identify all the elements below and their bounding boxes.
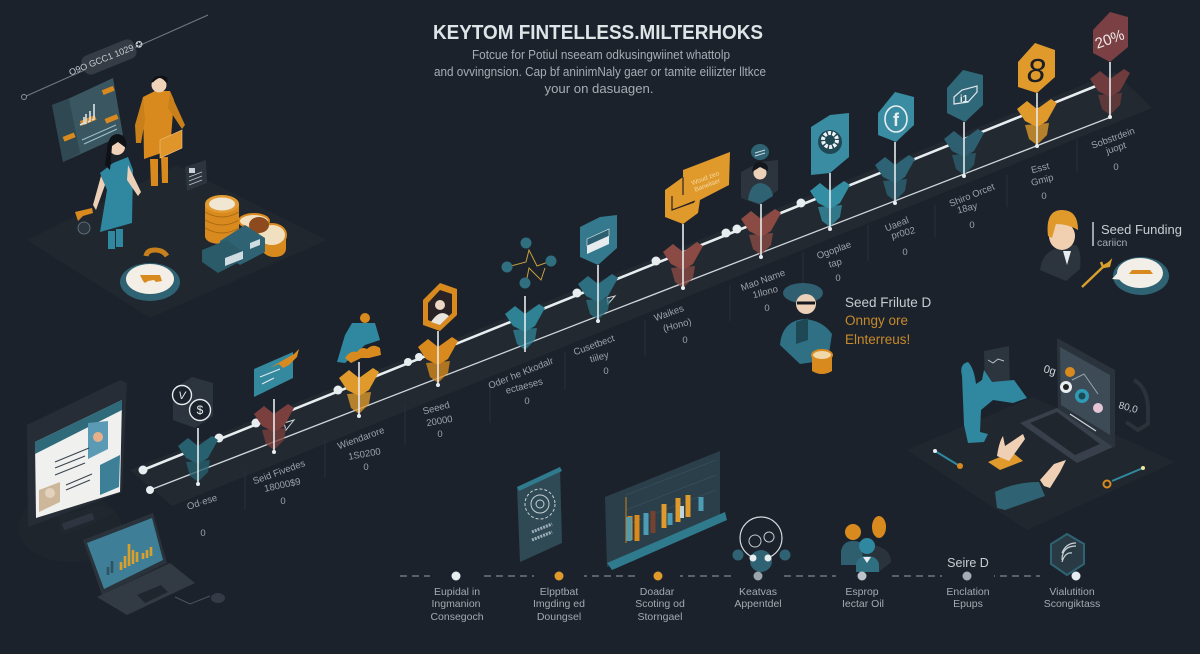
desktop monitor xyxy=(18,380,127,562)
step labels: Elpptbat xyxy=(540,586,578,598)
step labels: Scoting od xyxy=(635,598,685,610)
label dividers xyxy=(245,140,1077,510)
timeline labels: 0 xyxy=(1041,191,1047,202)
step labels: Ingmanion xyxy=(431,598,481,610)
metric badge on line: O9O GCC1 1029 ✪ xyxy=(67,38,145,77)
timeline labels: 0 xyxy=(835,273,841,284)
intro text: Fotcue for Potiul nseeam odkusingwiinet whattolp xyxy=(472,48,730,62)
callout text: Onngy ore xyxy=(845,313,908,328)
timeline labels: tap xyxy=(828,257,843,271)
milestone 5 xyxy=(502,238,556,352)
tablet icon xyxy=(517,467,562,562)
cash bundles xyxy=(202,225,265,273)
vertical rule xyxy=(1092,222,1094,246)
step labels: Scongiktass xyxy=(1044,598,1100,610)
callout text: Seed Frilute D xyxy=(845,295,932,310)
timeline labels: (Hono) xyxy=(662,317,693,335)
step labels: Epups xyxy=(953,598,983,610)
milestone 2 xyxy=(254,349,299,454)
timeline labels: Seeed xyxy=(422,400,451,417)
hexagon signal icon xyxy=(1051,534,1084,575)
milestone 13: 20% xyxy=(1093,26,1127,53)
panel: right laptop scene xyxy=(907,338,1175,530)
milestone 11 xyxy=(944,70,984,178)
investor figure xyxy=(780,283,832,374)
step labels: Consegoch xyxy=(430,611,484,623)
timeline labels: 0 xyxy=(200,528,206,539)
man icon xyxy=(1040,210,1080,281)
milestone 6 xyxy=(578,215,618,323)
milestone 4 xyxy=(418,283,458,387)
timeline labels: Seid Fivedes xyxy=(251,458,307,487)
secondary timeline line xyxy=(146,117,1111,494)
speech bubble xyxy=(1112,257,1169,295)
band surface xyxy=(130,72,1152,506)
timeline labels: 1Ilono xyxy=(751,284,779,301)
step labels: Storngael xyxy=(638,611,682,623)
milestone 12: 8 xyxy=(1027,52,1046,89)
timeline labels: Waikes xyxy=(653,303,686,324)
panel: top-left team and funding scene xyxy=(22,15,327,318)
step labels: Imgding ed xyxy=(533,598,585,610)
timeline labels: Uaeal xyxy=(883,215,911,234)
milestone 3 xyxy=(337,313,381,418)
timeline labels: 18000$9 xyxy=(263,476,302,495)
laptop xyxy=(83,513,225,615)
milestone 13 xyxy=(1090,12,1130,119)
intro text xyxy=(434,48,766,96)
timeline labels: 20000 xyxy=(426,414,454,429)
milestone 11: i1 xyxy=(960,94,969,105)
timeline labels: Shiro Orcet xyxy=(948,181,997,210)
step labels: Appentdel xyxy=(734,598,782,610)
timeline labels: Gmip xyxy=(1030,172,1055,189)
dashed line xyxy=(400,575,1040,577)
timeline labels xyxy=(186,126,1136,539)
panel: milestone timeline band xyxy=(130,12,1152,539)
main timeline line xyxy=(138,86,1096,474)
seed funding label: Seed Funding xyxy=(1101,222,1182,237)
timeline labels: 0 xyxy=(603,366,609,377)
team icon xyxy=(841,516,891,572)
panel: seed funding callout top right xyxy=(1040,210,1182,295)
milestone 10 xyxy=(875,92,915,205)
timeline labels: Cusetbect xyxy=(572,333,616,358)
step labels: Eupidal in xyxy=(434,586,480,598)
chart board icon xyxy=(605,451,727,570)
milestone 1 xyxy=(172,377,218,486)
panel: bottom-left devices xyxy=(18,380,225,615)
timeline labels: ectaeses xyxy=(505,376,544,397)
milestone 7: Woud zeo xyxy=(691,170,721,187)
step labels: Doungsel xyxy=(537,611,581,623)
timeline labels: 1S0200 xyxy=(347,446,382,463)
metric badge on line xyxy=(22,15,208,100)
milestone 7: Baneliser xyxy=(694,177,722,194)
floating chart card: 0g s xyxy=(1042,363,1066,380)
intro text: your on dasuagen. xyxy=(544,82,654,96)
timeline labels: 0 xyxy=(1113,162,1119,173)
title: KEYTOM FINTELLESS.MILTERHOKS xyxy=(433,22,763,44)
timeline labels: Sobstrdein xyxy=(1090,126,1136,152)
timeline labels: 0 xyxy=(363,462,369,473)
timeline labels: 18ay xyxy=(956,201,979,217)
hands xyxy=(988,434,1066,510)
timeline labels: juopt xyxy=(1104,140,1128,157)
coin stacks xyxy=(205,195,286,257)
timeline labels: Oder he Kkodalr xyxy=(487,356,555,392)
step labels: Esprop xyxy=(845,586,879,598)
face icon xyxy=(732,517,790,572)
step labels: Iectar Oil xyxy=(842,598,884,610)
floor platform xyxy=(27,165,327,318)
floor xyxy=(907,397,1175,530)
step labels: Enclation xyxy=(946,586,990,598)
step labels: Keatvas xyxy=(739,586,777,598)
timeline labels: 0 xyxy=(902,247,908,258)
step labels: Vialutition xyxy=(1049,586,1095,598)
timeline labels: Ogoplae xyxy=(815,239,853,262)
milestone 9 xyxy=(810,113,850,231)
panel: bottom process timeline xyxy=(400,451,1106,623)
dashboard board xyxy=(52,78,123,162)
document xyxy=(185,160,207,191)
milestone 10: f xyxy=(893,110,900,130)
callout text: Elnterreus! xyxy=(845,332,910,347)
tools xyxy=(933,449,1145,488)
robot arm xyxy=(961,362,1027,443)
step labels: Doadar xyxy=(640,586,675,598)
timeline labels: 0 xyxy=(682,335,688,346)
floating chart card xyxy=(984,346,1148,430)
person: orange figure xyxy=(135,77,185,186)
timeline labels: Od·ese xyxy=(186,493,219,513)
person: teal figure xyxy=(75,134,141,249)
step dots xyxy=(452,572,1080,580)
milestone 1: V xyxy=(178,390,187,402)
timeline labels: 0 xyxy=(437,429,443,440)
laptop xyxy=(1020,338,1115,463)
timeline labels: Mao Name xyxy=(739,268,787,294)
caption: cariicn xyxy=(1097,237,1128,249)
timeline labels: tiiley xyxy=(589,350,610,365)
timeline labels: Wiendarore xyxy=(336,425,386,452)
panel: funding callout with investor xyxy=(780,283,932,374)
step labels xyxy=(430,586,1100,623)
timeline labels: Esst xyxy=(1030,161,1051,176)
timeline labels: 0 xyxy=(969,220,975,231)
milestone 1: $ xyxy=(197,403,204,417)
intro text: and ovvingnsion. Cap bf aninimNaly gaer or tamite eiliizter lltkce xyxy=(434,65,766,79)
milestone 8 xyxy=(741,144,781,259)
wrench xyxy=(1082,262,1110,287)
timeline labels: 0 xyxy=(280,496,286,507)
floating chart card: 80,0 xyxy=(1117,400,1139,416)
callout text xyxy=(845,295,932,347)
timeline labels: 0 xyxy=(524,396,530,407)
lock dial xyxy=(120,250,180,301)
key xyxy=(75,208,93,221)
timeline labels: 0 xyxy=(764,303,770,314)
series label: Seire D xyxy=(947,556,989,570)
timeline labels: pr002 xyxy=(890,225,917,242)
milestone 7 xyxy=(663,152,730,290)
milestone 12 xyxy=(1017,43,1057,148)
